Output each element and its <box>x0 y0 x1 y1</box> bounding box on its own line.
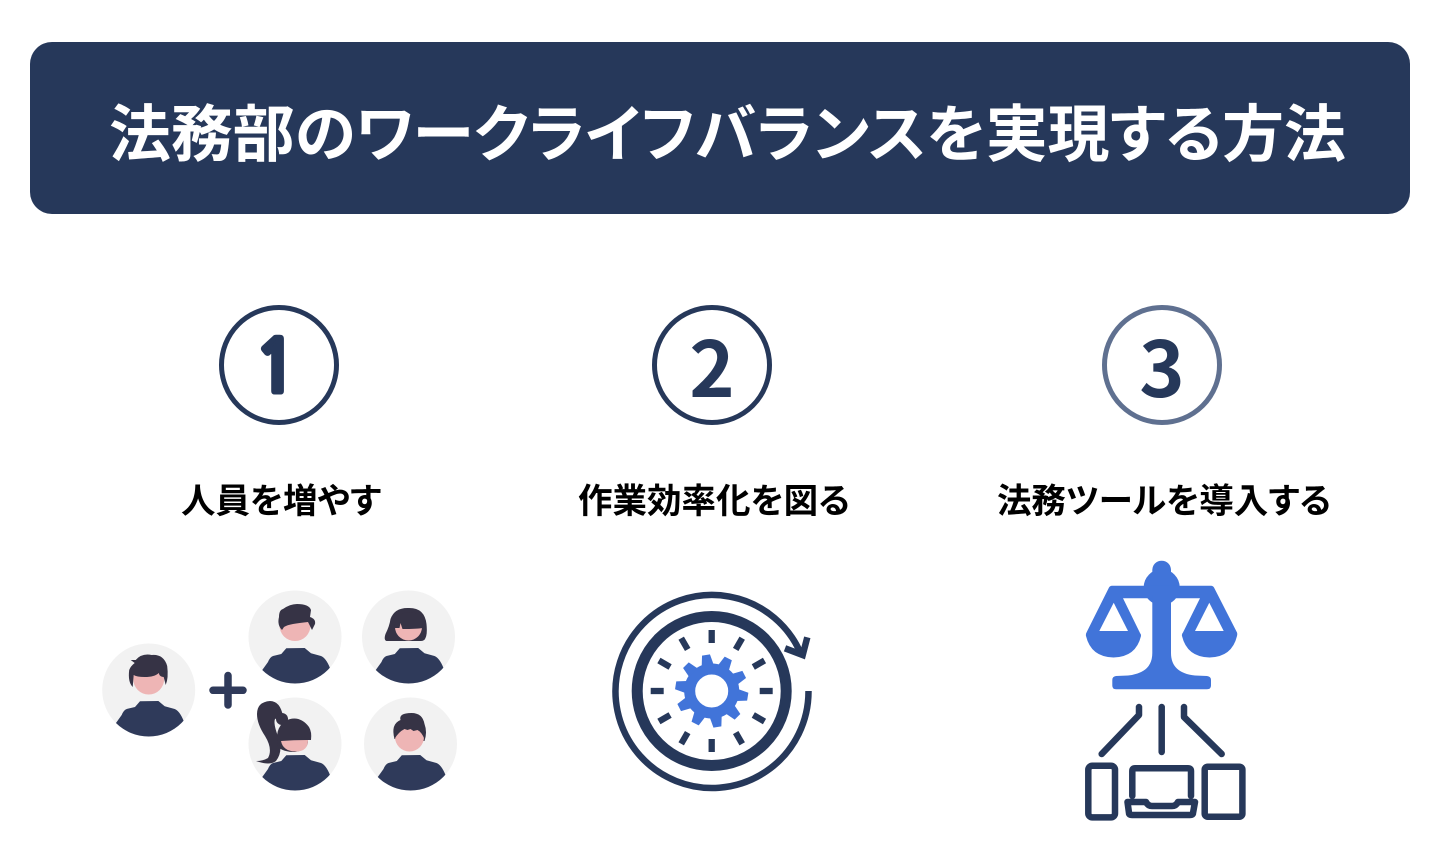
avatar: current staff member <box>102 644 195 740</box>
avatar: added woman with bun <box>364 698 457 794</box>
heading: adopt legal tools: 法務ツールを導入する <box>997 473 1331 523</box>
title: 法務部のワークライフバランスを実現する方法 <box>109 84 1346 174</box>
avatar: added man <box>248 590 342 687</box>
icon: plus sign <box>213 676 243 705</box>
gear <box>675 654 749 728</box>
avatar: added woman with ponytail <box>248 698 342 794</box>
heading: add staff: 人員を増やす <box>181 473 381 523</box>
avatar: added woman with bob hair <box>362 590 455 687</box>
number 1 <box>219 305 339 425</box>
icon: people group <box>102 590 457 794</box>
device icons <box>1088 766 1242 817</box>
number 2 <box>652 305 772 425</box>
outer cycle arrow <box>616 595 809 788</box>
number 3 <box>1102 305 1222 425</box>
number 1: 1 <box>254 331 298 403</box>
number 3: 3 <box>1139 309 1185 420</box>
number 2: 2 <box>689 309 735 420</box>
icon: scales with devices <box>1086 561 1242 817</box>
icon: gear with clock and cycle arrow <box>616 595 809 788</box>
clock ticks <box>651 630 773 752</box>
heading: improve efficiency: 作業効率化を図る <box>578 473 850 523</box>
title banner <box>30 42 1410 214</box>
connector lines <box>1102 707 1222 754</box>
clock ring <box>637 616 786 766</box>
scales of justice <box>1086 561 1237 689</box>
